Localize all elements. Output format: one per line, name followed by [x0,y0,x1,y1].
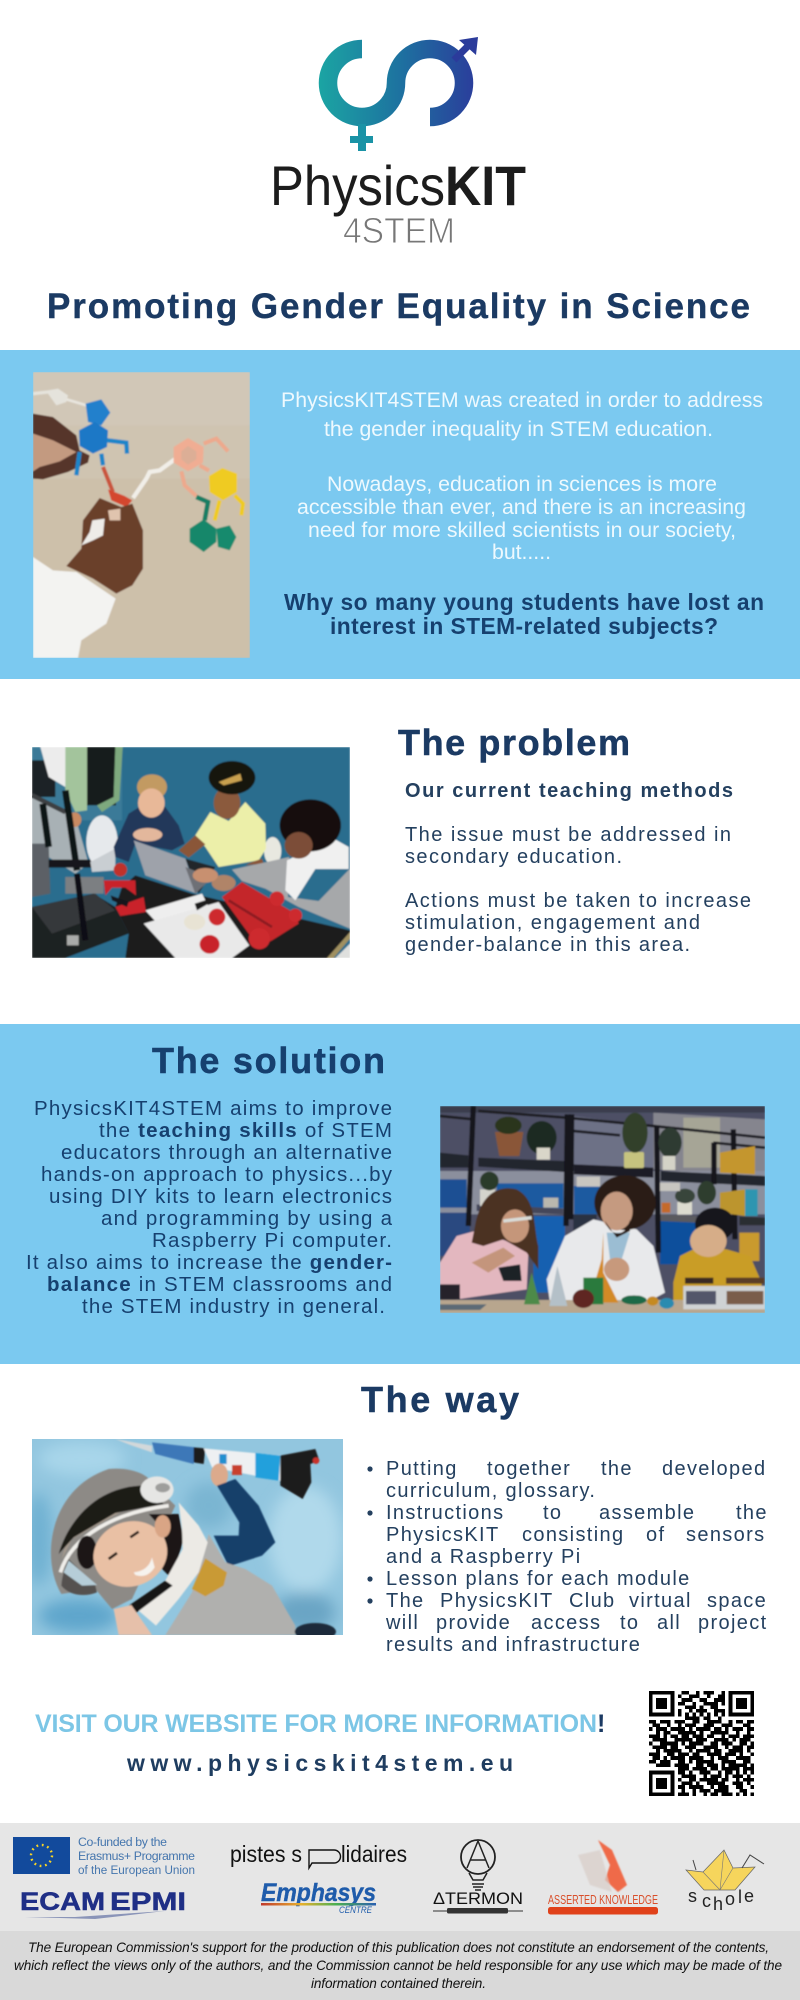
intro paragraph one [281,388,763,441]
solution text: PhysicsKIT4STEM aims to improve [34,1097,392,1120]
logo: Schole paper boat: e [744,1886,754,1906]
bullet list: developed [662,1458,766,1480]
problem text: The issue must be addressed in [405,824,731,846]
solution text: the teaching skills of STEM [99,1119,392,1142]
problem subheading: Our current teaching methods [405,780,733,802]
intro question [284,589,764,639]
logo: EU flag with Erasmus+ text: Erasmus+ Programme [78,1849,195,1863]
bullet list: provide [436,1612,511,1634]
logo: Schole paper boat [686,1850,764,1914]
solution text: It also aims to increase the gender- [26,1251,392,1274]
logo: Asserted Knowledge: ASSERTED KNOWLEDGE [548,1893,658,1907]
panel: the problem [32,722,751,958]
call to action [35,1710,605,1776]
bullet list: PhysicsKIT [386,1524,500,1546]
bullet list: curriculum, glossary. [386,1480,596,1502]
bullet list: virtual [629,1590,692,1612]
logo wordmark bold part: KIT [445,154,526,217]
bullet list: of [646,1524,665,1546]
panel: disclaimer: which reflect the views only of the authors, and the Commission cannot be held responsible for any use which may be made of the [14,1958,782,1973]
QR code [649,1691,754,1796]
bullet list: assemble [599,1502,695,1524]
intro question: Why so many young students have lost an [284,589,764,615]
bullet list: the [736,1502,768,1524]
solution text: and programming by using a [101,1207,393,1230]
problem text [405,824,751,956]
intro paragraph two: accessible than ever, and there is an increasing [297,495,746,519]
bullet list: Lesson plans for each module [386,1568,691,1590]
bullet list: and a Raspberry Pi [386,1546,582,1568]
solution text [26,1097,393,1318]
website address: www.physicskit4stem.eu [126,1750,513,1776]
panel: partner logos [0,1823,800,1931]
logo subtitle: 4STEM [343,210,455,251]
logo: Schole paper boat: h [713,1894,723,1914]
panel: disclaimer: information contained therein. [311,1976,486,1991]
bullet list: will [385,1612,419,1634]
logo: ECAM EPMI [20,1888,186,1919]
exclamation mark: ! [597,1710,605,1738]
photo: child in astronaut helmet with toy rocket [25,1439,343,1640]
logo: pistes solidaires: lidaires [341,1841,407,1867]
solution text: educators through an alternative [61,1141,392,1164]
heading: The way: The way [361,1379,519,1420]
logo: pistes solidaires: pistes s [230,1841,302,1867]
intro paragraph two: Nowadays, education in sciences is more [327,472,717,496]
logo: EU flag with Erasmus+ text: of the European Union [78,1863,195,1877]
logo: EU flag with Erasmus+ text [13,1835,195,1877]
bullet list: The [386,1590,425,1612]
logo: Emphasys Centre: CENTRE [339,1905,373,1916]
solution text: Raspberry Pi computer. [152,1229,392,1252]
intro paragraph two [297,472,746,564]
photo: students with 3D printer and robot [32,747,350,958]
bullet list: Instructions [386,1502,504,1524]
logo: Asserted Knowledge [548,1840,658,1914]
bullet list: sensors [686,1524,765,1546]
intro question: interest in STEM-related subjects? [330,613,718,639]
heading: The problem: The problem [398,722,630,763]
problem text: stimulation, engagement and [405,912,700,934]
intro paragraph two: need for more skilled scientists in our society, [308,518,736,542]
logo: ECAM EPMI: ECAM [20,1888,105,1916]
website prompt: VISIT OUR WEBSITE FOR MORE INFORMATION [35,1710,597,1738]
logo: EU flag with Erasmus+ text: Co-funded by the [78,1835,167,1849]
bullet list: Club [569,1590,616,1612]
intro paragraph one: PhysicsKIT4STEM was created in order to address [281,388,763,412]
logo: Atermon: ΔTERMON [433,1889,523,1908]
problem text: Actions must be taken to increase [405,890,751,912]
heading: The solution: The solution [152,1040,385,1081]
bullet list: to [620,1612,639,1634]
bullet list: Putting [386,1458,458,1480]
bullet list: access [531,1612,601,1634]
problem text: gender-balance in this area. [405,934,690,956]
problem text: secondary education. [405,846,622,868]
bullet list: to [543,1502,562,1524]
logo: Schole paper boat: o [725,1889,735,1909]
logo: PhysicsKIT 4STEM [270,37,526,251]
panel: introduction [0,350,800,679]
panel: the solution [0,1024,800,1364]
logo: pistes solidaires [230,1841,407,1868]
bullet list: all [657,1612,681,1634]
bullet list: together [487,1458,571,1480]
solution text: using DIY kits to learn electronics [49,1185,392,1208]
intro paragraph one: the gender inequality in STEM education. [324,417,713,441]
bullet list: the [601,1458,633,1480]
intro paragraph two: but..... [492,540,551,564]
bullet list: project [698,1612,767,1634]
logo: ECAM EPMI: EPMI [110,1888,186,1916]
bullet list: PhysicsKIT [440,1590,554,1612]
solution text: hands-on approach to physics...by [41,1163,393,1186]
bullet list [367,1458,768,1656]
logo: Schole paper boat: l [738,1887,742,1907]
photo: teacher and children in a chemistry lab [440,1106,765,1313]
icon: gender symbol S curve [328,37,478,151]
solution text: balance in STEM classrooms and [47,1273,392,1296]
panel: the way [25,1379,768,1656]
bullet list: consisting [522,1524,624,1546]
panel: disclaimer: The European Commission's support for the production of this publication does not constitute an endorsement of the contents, [28,1940,769,1955]
bullet list: results and infrastructure [386,1634,641,1656]
solution text: the STEM industry in general. [82,1295,385,1318]
logo wordmark: Physics [270,154,445,217]
logo: Schole paper boat: s [688,1886,697,1906]
title: Promoting Gender Equality in Science [47,287,750,326]
logo: Schole paper boat: c [702,1891,711,1911]
logo: Emphasys Centre: Emphasys [261,1879,376,1907]
bullet list: space [707,1590,767,1612]
logo: Atermon [433,1840,523,1914]
panel: disclaimer [0,1931,800,2000]
photo: hands holding molecule model [33,372,250,658]
